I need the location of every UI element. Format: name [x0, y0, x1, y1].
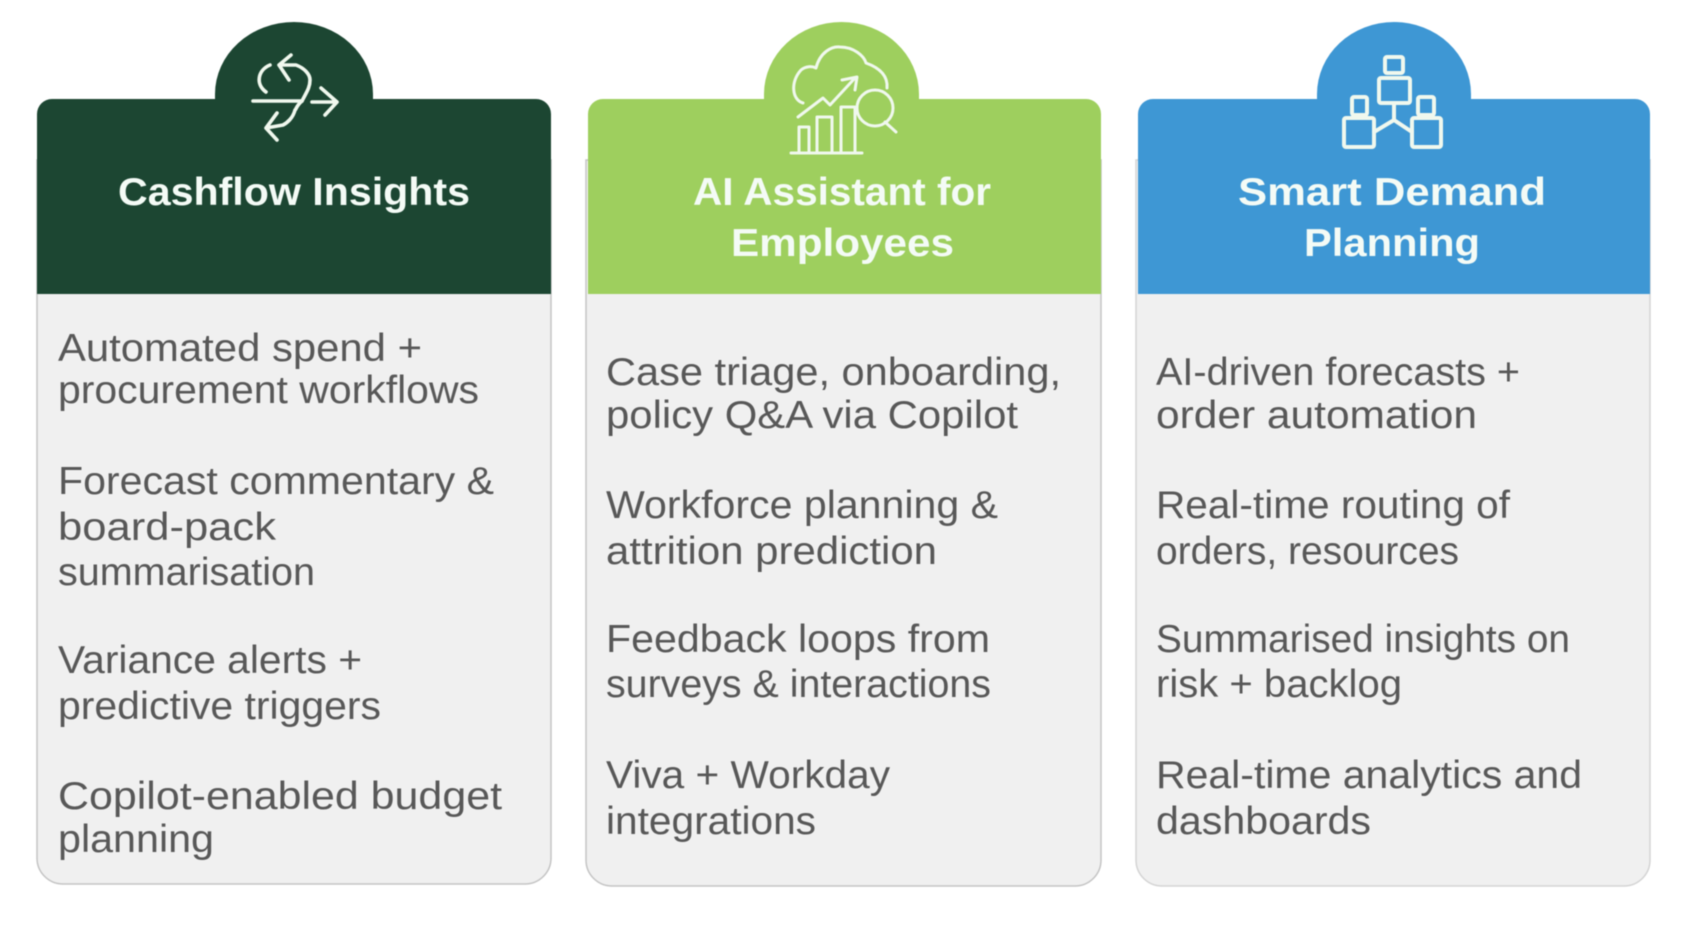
- text block: bullets: Copilot-enabled budget: [58, 775, 502, 818]
- text block: bullets: Forecast commentary &: [58, 460, 494, 503]
- text block: bullets: [606, 351, 1061, 843]
- text block: bullets: [1156, 351, 1582, 843]
- text block: bullets: [58, 327, 502, 861]
- text block: bullets: procurement workflows: [58, 369, 479, 412]
- text block: bullets: planning: [58, 818, 214, 861]
- text block: bullets: Variance alerts +: [58, 639, 362, 682]
- text block: bullets: Feedback loops from: [606, 618, 990, 661]
- heading: Employees: [731, 222, 954, 265]
- text block: bullets: surveys & interactions: [606, 663, 991, 706]
- text block: bullets: order automation: [1156, 394, 1477, 437]
- text block: bullets: Workforce planning &: [606, 484, 998, 527]
- icon: cloud chart magnifier: [791, 47, 896, 153]
- text block: bullets: integrations: [606, 800, 816, 843]
- text block: bullets: AI-driven forecasts +: [1156, 351, 1520, 394]
- text block: bullets: Case triage, onboarding,: [606, 351, 1061, 394]
- heading: [1238, 171, 1546, 265]
- text block: bullets: predictive triggers: [58, 685, 381, 728]
- text block: bullets: Summarised insights on: [1156, 618, 1570, 661]
- header: [1138, 22, 1650, 294]
- text block: bullets: Viva + Workday: [606, 754, 891, 797]
- heading: AI Assistant for: [693, 171, 991, 214]
- heading: Smart Demand: [1238, 171, 1546, 214]
- heading: Cashflow Insights: [118, 171, 470, 214]
- panel: smart demand planning: [1136, 22, 1650, 886]
- card body: [586, 160, 1101, 886]
- heading: Planning: [1304, 222, 1480, 265]
- heading: [693, 171, 991, 265]
- text block: bullets: attrition prediction: [606, 530, 937, 573]
- text block: bullets: Real-time analytics and: [1156, 754, 1582, 797]
- card body: [1136, 160, 1650, 886]
- header: [37, 22, 551, 294]
- text block: bullets: Real-time routing of: [1156, 484, 1510, 527]
- icon: network blocks: [1344, 57, 1441, 147]
- text block: bullets: risk + backlog: [1156, 663, 1402, 706]
- text block: bullets: dashboards: [1156, 800, 1371, 843]
- text block: bullets: summarisation: [58, 551, 315, 594]
- text block: bullets: policy Q&A via Copilot: [606, 394, 1018, 437]
- card body: [37, 160, 551, 884]
- panel: cashflow insights: [37, 22, 551, 884]
- text block: bullets: board-pack: [58, 506, 277, 549]
- panel: AI assistant for employees: [586, 22, 1101, 886]
- text block: bullets: Automated spend +: [58, 327, 422, 370]
- icon: cycle arrows: [253, 55, 337, 140]
- text block: bullets: orders, resources: [1156, 530, 1459, 573]
- header: [588, 22, 1101, 294]
